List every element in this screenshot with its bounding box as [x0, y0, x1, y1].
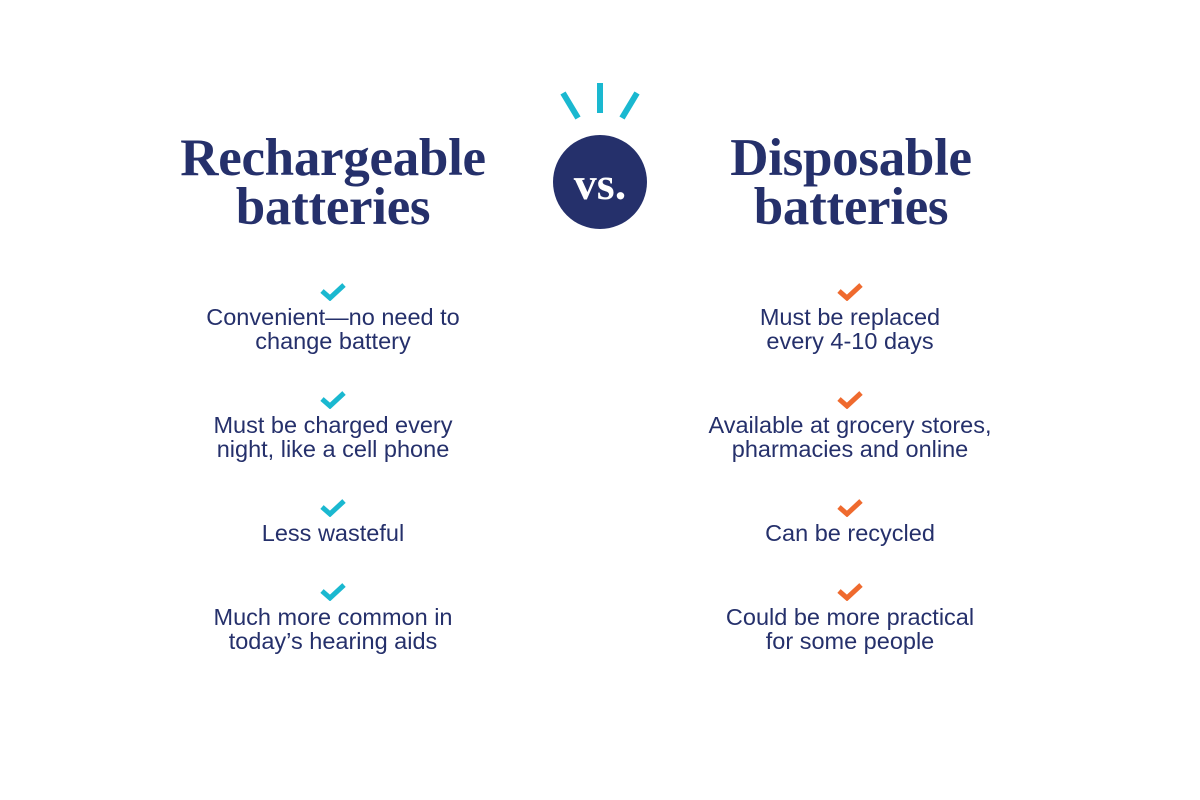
item: Must be charged every [213, 412, 453, 438]
item [760, 283, 940, 354]
item [726, 583, 974, 654]
item: every 4-10 days [766, 328, 934, 354]
item [213, 391, 453, 462]
title: rechargeable [180, 129, 486, 236]
item [214, 583, 452, 654]
vs badge: vs. [574, 158, 626, 209]
item: Available at grocery stores, [708, 412, 992, 438]
title: disposable: Disposable [730, 129, 972, 187]
item: pharmacies and online [732, 436, 968, 462]
item [765, 499, 935, 546]
item: today’s hearing aids [229, 628, 437, 654]
title: disposable [730, 129, 972, 236]
item: night, like a cell phone [217, 436, 449, 462]
title: disposable: batteries [754, 178, 948, 236]
item: change battery [255, 328, 411, 354]
list: disposable [708, 283, 992, 654]
item: Convenient—no need to [206, 304, 460, 330]
item [262, 499, 404, 546]
icon: rays [563, 83, 637, 118]
title: rechargeable: Rechargeable [180, 129, 486, 187]
item: Could be more practical [726, 604, 974, 630]
item [206, 283, 460, 354]
vs badge [553, 83, 647, 229]
item: Can be recycled [765, 520, 935, 546]
item: Must be replaced [760, 304, 940, 330]
item: for some people [766, 628, 934, 654]
title: rechargeable: batteries [236, 178, 430, 236]
item [708, 391, 992, 462]
item: Much more common in [214, 604, 452, 630]
item: Less wasteful [262, 520, 404, 546]
list: rechargeable [206, 283, 460, 654]
